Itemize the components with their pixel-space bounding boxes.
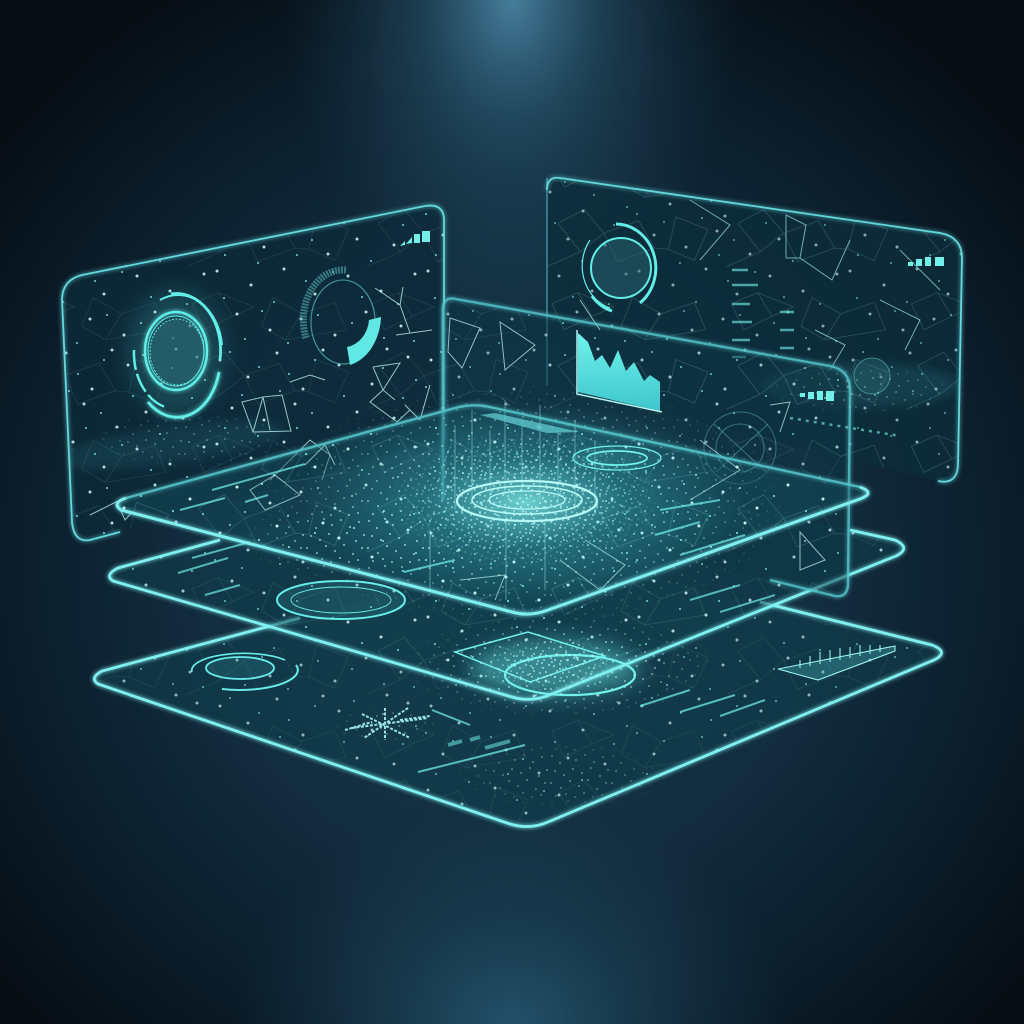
icon: radar ring [582,224,656,311]
small bars [400,231,430,246]
data rows [732,270,794,357]
ring: front hologram [455,632,640,696]
area chart [577,330,662,412]
top tab bar [480,413,580,433]
ring: left dial [192,653,298,690]
haze band [70,422,280,468]
web nodes [250,440,740,600]
panel: middle layer [109,461,904,699]
haze band [760,363,960,407]
panel: rear right [547,178,962,482]
panel: front vertical [443,298,900,596]
ring: left dial [277,581,405,619]
web cluster [90,287,432,520]
bar cluster [778,645,895,680]
ring: central hologram [457,481,597,521]
ring: rear dial [573,446,661,470]
dashed data row [790,418,900,436]
small bars [800,391,834,401]
outline [443,298,850,596]
web cluster [690,200,940,370]
dial [854,358,890,394]
icon: donut gauge [303,270,381,365]
panel: bottom layer [94,553,942,827]
outline [94,602,942,827]
list bars [418,690,765,772]
icon: target ring [126,289,226,417]
list bars [178,542,775,612]
dim dial [704,412,776,484]
outline [547,178,962,482]
scattered particle clouds [93,366,948,807]
outline [62,206,444,540]
small bars [908,257,944,266]
vertical data streams [430,400,595,600]
icon: snowflake network [345,708,430,740]
outline: upper edges [126,405,860,498]
panel: top layer [93,366,948,807]
list bars [180,464,745,572]
panel: rear left [54,206,444,540]
central glow [300,402,750,602]
web cluster [448,300,825,570]
pills [448,737,510,748]
outline: lower edges [117,487,868,614]
core particles [390,430,661,692]
outline [109,530,904,699]
